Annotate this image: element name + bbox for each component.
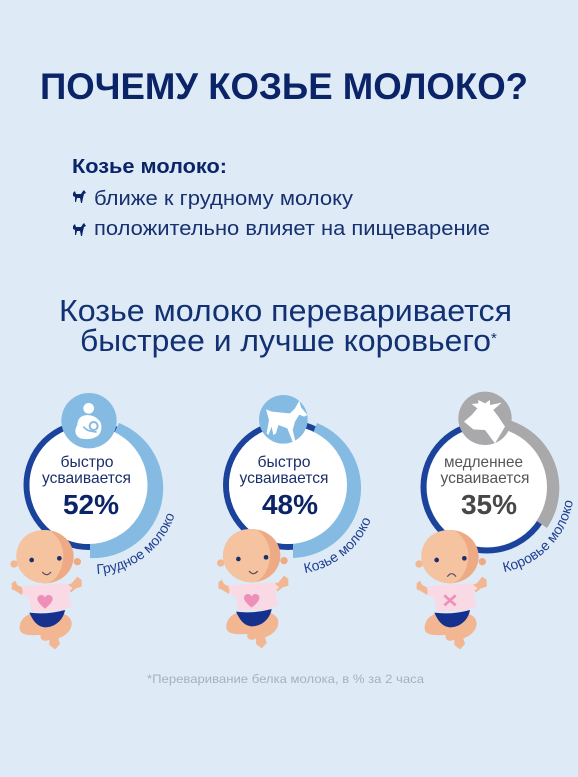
percent: 48% (262, 489, 318, 520)
panel: breast milk: усваивается (42, 470, 131, 487)
icon: goat bullet 1 (73, 190, 86, 203)
panel: goat milk: усваивается (240, 470, 328, 487)
icon: goat bullet 2 (73, 223, 86, 236)
footnote: *Переваривание белка молока, в % за 2 часа (147, 672, 424, 686)
panel: breast milk (24, 393, 174, 576)
arc label: Грудное молоко (97, 514, 174, 576)
bullet text 2: положительно влияет на пищеварение (94, 218, 490, 240)
baby: happy, heart shirt, middle (217, 529, 288, 648)
percent: 35% (461, 489, 517, 520)
stat text: медленнее (444, 454, 523, 471)
panel: cow milk: усваивается (440, 470, 530, 487)
arc label: Коровье молоко (502, 500, 572, 572)
panel: goat milk (223, 395, 370, 573)
baby: happy, heart shirt, left (10, 530, 82, 649)
baby: sad, cross shirt, right (415, 530, 487, 649)
percent: 52% (63, 489, 119, 520)
panel: cow milk (420, 392, 572, 572)
title: ПОЧЕМУ КОЗЬЕ МОЛОКО? (40, 66, 528, 107)
icon: cow (458, 392, 512, 445)
subtitle (59, 293, 512, 358)
ring and arc (226, 423, 361, 558)
subtitle: быстрее и лучше коровьего (80, 323, 491, 358)
subheading: goat milk: Козье молоко: (72, 155, 227, 178)
subtitle: Козье молоко переваривается (59, 293, 512, 328)
bullet text 1: ближе к грудному молоку (94, 188, 353, 210)
arc label: Козье молоко (304, 518, 370, 573)
icon: mother and baby (61, 393, 117, 448)
icon: goat (259, 395, 308, 444)
stat text: быстро (258, 454, 311, 471)
ring and arc (26, 423, 163, 558)
ring and arc (424, 419, 559, 550)
stat text: быстро (60, 454, 114, 471)
subtitle: * (491, 330, 497, 347)
